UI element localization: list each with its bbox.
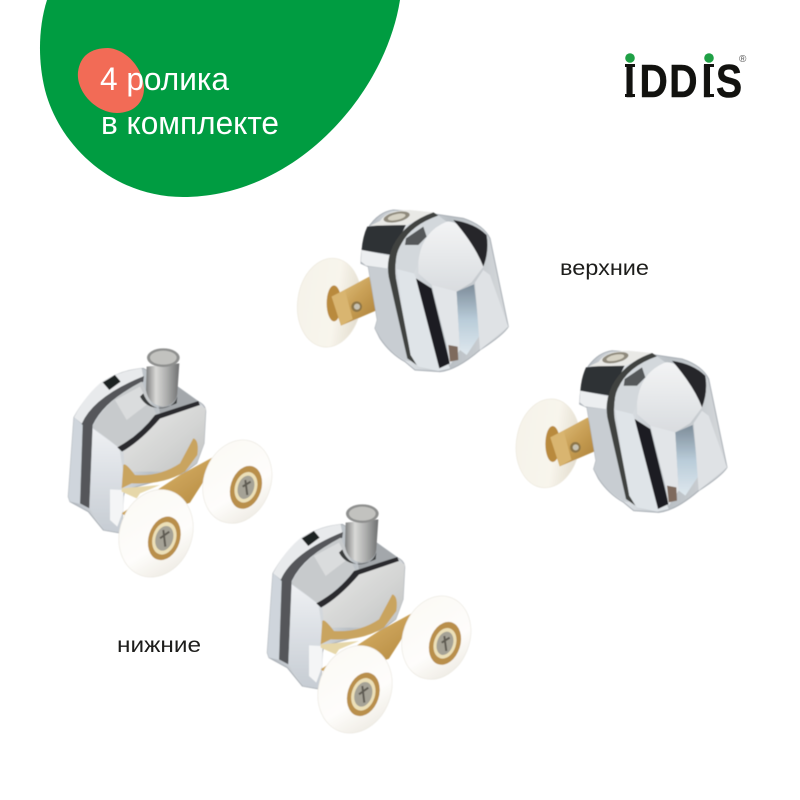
logo: IDDIS: ® [739, 54, 747, 65]
upper roller 1 [292, 209, 508, 372]
coral accent blob [78, 48, 144, 113]
label: lower: нижние [117, 634, 201, 657]
heading [100, 61, 279, 141]
lower roller 2 [267, 504, 482, 744]
lower roller 1 [68, 348, 283, 588]
heading: в комплекте [101, 105, 279, 141]
label: upper: верхние [560, 257, 649, 280]
upper roller 2 [510, 350, 727, 512]
green corner shape [40, 0, 400, 197]
heading: 4 ролика [100, 61, 229, 97]
logo: IDDIS: IDDIS [624, 56, 742, 108]
